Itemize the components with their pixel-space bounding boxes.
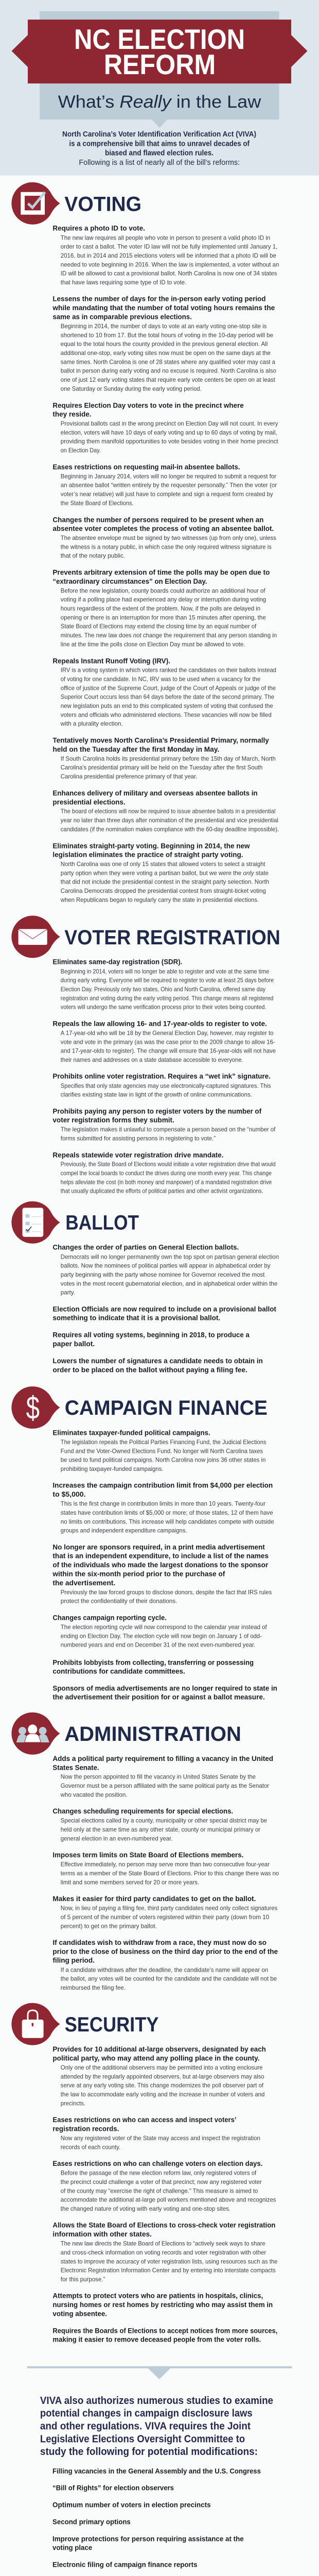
item: cross-check [52, 2222, 278, 2283]
item: photo ID: that have laws requiring some type of ID to vote. [61, 279, 186, 286]
item: order of parties: party. [61, 1289, 75, 1296]
item: paying registrars: voter registration forms they submit. [52, 1116, 174, 1124]
item: same-day registration: Election Day. Previously only two states, Ohio and North Carolina, offered same day [61, 986, 265, 993]
item: voter challenges: the changed nature of voting with early voting and one-stop sites. [61, 2205, 231, 2212]
item: special elections: Changes scheduling requirements for special elections. [52, 1807, 233, 1815]
item: instant runoff: Superior Court occurs less than 64 days before the date of the second primary. The [61, 693, 274, 701]
item: senate vacancy: who vacated the position. [60, 1791, 128, 1798]
item: military ballots: The board of elections will now be required to issue absentee ballots in a presidential [61, 808, 275, 815]
item: lobbyists: Prohibits lobbyists from collecting, transferring or possessing [52, 1658, 254, 1666]
item: candidate withdrawal: If candidates wish to withdraw from a race, they must now do so [52, 1939, 267, 1946]
item: at-large observers: attended by the regularly appointed observers, but at-large observers may also [61, 2073, 264, 2080]
item: third party candidates: percent) to get on the primary ballot. [61, 1922, 157, 1929]
item: third party candidates: of 5 percent of the number of voters registered within their party (down from 10 [61, 1913, 270, 1921]
item: paying registrars: Prohibits paying any person to register voters by the number of [52, 1107, 262, 1115]
list: study topics [52, 2467, 261, 2576]
section: campaign finance [11, 1386, 277, 1701]
item: provisional ballot: something to indicate that it is a provisional ballot. [52, 1314, 220, 1322]
section: voting [11, 182, 279, 903]
item: reporting cycle: numbered years and end on December 31 of the next even-numbered year. [61, 1641, 255, 1649]
item: print media sponsors: protect the confidentiality of their donations. [61, 1598, 177, 1605]
item: contribution limit: groups and independent expenditure campaigns. [61, 1527, 187, 1534]
heading: voter registration: VOTER REGISTRATION [64, 926, 280, 949]
item: at-large observers: Provides for 10 additional at-large observers, designated by each [52, 2045, 266, 2053]
icon: ballot checkbox [11, 182, 60, 225]
item: registration drive mandate: helps alleviate the cost (in both money and manpower) of a mandated registration drive [61, 1178, 272, 1185]
item: registration drive mandate: Repeals statewide voter registration drive mandate. [52, 1151, 224, 1159]
item: registration records: Eases restrictions on who can access and inspect voters’ [52, 2116, 237, 2124]
item: print media sponsors: Previously the law forced groups to disclose donors, despite the fact that IRS rules [61, 1588, 272, 1596]
item: at-large observers: serve at any early voting site. This change modernizes the poll observer part of [61, 2082, 264, 2089]
item: candidate withdrawal: reimbursed the filing fee. [61, 1984, 126, 1991]
item: patients [52, 2292, 273, 2317]
item: at-large observers: political party, who may attend any polling place in the county. [52, 2054, 260, 2062]
item: voter challenges: accommodate the additional at-large poll workers mentioned above and recognizes [61, 2196, 276, 2204]
item: print media sponsors: of the individuals who made the largest donations to the sponsor [52, 1561, 269, 1569]
item: presidential primary: If South Carolina holds its presidential primary before the 15th day of March, North [61, 755, 276, 762]
item: poll extension: hours regardless of the extent of the problem. Now, if the polls are delayed in [61, 605, 260, 612]
item: online registration [52, 1073, 271, 1098]
item: absentee requests: voter’s near relative) will just have to complete and sign a request form created by [61, 490, 273, 498]
text block: studies introduction: potential changes in campaign disclosure laws [40, 2408, 253, 2419]
item: early voting [52, 295, 276, 392]
item: voter challenges: Eases restrictions on who can challenge voters on election days. [52, 2160, 262, 2167]
item: photo ID: order to cast a ballot. The voter ID law will not be fully implemented until January 1, [61, 243, 277, 250]
item: registration records: Now any registered voter of the State may access and inspect the registration [61, 2134, 260, 2142]
item: 16- and 17-year-olds: A 17-year-old who will be 18 by the General Election Day, however, may register to [61, 1029, 274, 1037]
item: absentee requests: an absentee ballot “written entirely by the requester personally.” Then the voter (or [61, 482, 277, 489]
item: print media sponsors: that is an independent expenditure, to include a list of the names [52, 1552, 269, 1560]
item: paper ballot [52, 1331, 250, 1348]
heading: security: SECURITY [65, 2013, 159, 2036]
item: poll extension: State Board of Elections may extend the closing time by an equal number of [61, 623, 257, 630]
item: paying registrars [52, 1107, 276, 1142]
intro text: is a comprehensive bill that aims to unravel decades of [69, 140, 250, 148]
item: special elections: held only at the same time as any other state, county or municipal primary or [61, 1826, 260, 1833]
item: special elections [52, 1807, 268, 1842]
item: poll extension: “extraordinary circumstances” on Election Day. [52, 578, 207, 585]
item: taxpayer funding: prohibiting taxpayer-funded campaigns. [61, 1465, 164, 1472]
intro text: biased and flawed election rules. [105, 149, 214, 158]
item: at-large observers: Only one of the additional observers may be permitted into a voting enclosure [61, 2064, 263, 2071]
item: order of parties: ballots. Now the nominees of political parties will appear in alphabetical order by [61, 1262, 271, 1269]
item: at-large observers: precincts. [61, 2099, 85, 2107]
text block: studies introduction: study the following for potential modifications: [40, 2446, 258, 2458]
item: order of parties: Democrats will no longer permanently own the top spot on partisan general election [61, 1253, 279, 1260]
item: third party candidates: Now, in lieu of paying a filing fee, third party candidates need only collect signatures [61, 1905, 277, 1912]
item: voter challenges [52, 2160, 276, 2212]
item: straight-party voting: Eliminates straight-party voting. Beginning in 2014, the new [52, 842, 250, 850]
heading: ballot: BALLOT [65, 1212, 139, 1234]
item: registration records: registration records. [52, 2125, 119, 2132]
item: term limits [52, 1851, 279, 1886]
item: registration drive mandate: that usually duplicated the efforts of political parties and other activist organizations. [61, 1188, 263, 1195]
item: 16- and 17-year-olds: Repeals the law allowing 16- and 17-year-olds to register to vote. [52, 1020, 267, 1027]
item: media sponsors: the advertisement their position for or against a ballot measure. [52, 1693, 265, 1701]
item: contribution limit: This is the first change in contribution limits in more than 10 years. Twenty-four [61, 1500, 265, 1507]
item: provisional ballot [52, 1305, 276, 1322]
item: media sponsors [52, 1684, 277, 1701]
item: poll extension: voting if a polling place had experienced any delay or interruption during voting [61, 596, 266, 603]
subtitle speech panel [40, 11, 279, 128]
item: media sponsors: Sponsors of media advertisements are no longer required to state in [52, 1684, 277, 1692]
item: straight-party voting: when Republicans began to regularly carry the state in presidential elections. [60, 896, 259, 903]
item: instant runoff [52, 657, 276, 727]
item: precinct: they reside. [52, 411, 92, 418]
intro text [62, 130, 256, 167]
list: study topics: Optimum number of voters in election precincts [52, 2501, 211, 2509]
item: registration records [52, 2116, 260, 2150]
section: voter registration [11, 916, 280, 1195]
item: voter challenges: of the county may “exercise the right of challenge.” This measure is aimed to [61, 2187, 258, 2194]
item: third party candidates: Makes it easier for third party candidates to get on the ballot. [52, 1895, 256, 1903]
icon: padlock [11, 2003, 60, 2045]
section: administration [11, 1713, 279, 1991]
item: voter challenges: Before the passage of the new election reform law, only registered voters of [61, 2170, 257, 2177]
item: order of parties [52, 1244, 279, 1296]
item: instant runoff: office of justice of the Supreme Court, judge of the Court of Appeals or judge of the [61, 684, 276, 691]
item: precinct: election, voters will have 10 days of early voting and up to 60 days of voting by mail, [61, 429, 277, 436]
item: contribution limit: no limits on contributions. This increase will help candidates compete with outside [61, 1518, 274, 1525]
item: straight-party voting: party option when they were voting a partisan ballot, but we were the only state [61, 869, 269, 876]
item: patients: nursing homes or rest homes by restricting who may assist them in [52, 2301, 273, 2309]
item: order of parties: Changes the order of parties on General Election ballots. [52, 1244, 239, 1251]
item: precinct: Requires Election Day voters to vote in the precinct where [52, 401, 244, 409]
item: witnesses: Changes the number of persons required to be present when an [52, 516, 263, 523]
item: precinct [52, 401, 278, 454]
item: instant runoff: voters and officials who administered elections. These vacancies will now be filled [61, 711, 272, 718]
section: ballot [11, 1201, 279, 1374]
item: instant runoff: Repeals Instant Runoff Voting (IRV). [52, 657, 170, 665]
item: paper ballot: paper ballot. [52, 1340, 95, 1348]
item: special elections: Special elections called by a county, municipality or other special district may be [61, 1817, 268, 1824]
item: signatures: Lowers the number of signatures a candidate needs to obtain in [52, 1357, 263, 1365]
item: term limits: Imposes term limits on State Board of Elections members. [52, 1851, 243, 1859]
item: third party candidates [52, 1895, 277, 1929]
item: absentee requests: Beginning in January 2014, voters will no longer be required to submit a request for [61, 472, 276, 480]
item: at-large observers: the law to accommodate early voting and the increase in number of voters and [61, 2091, 264, 2098]
item: same-day registration [52, 958, 274, 1011]
item: special elections: general election in an even-numbered year. [61, 1835, 172, 1842]
item: military ballots: Enhances delivery of military and overseas absentee ballots in [52, 789, 258, 797]
item: absentee requests: the State Board of Elections. [61, 499, 134, 506]
heading: administration: ADMINISTRATION [64, 1723, 241, 1745]
item: early voting: same as in comparable previous elections. [52, 313, 192, 320]
item: deceased voters [52, 2327, 277, 2344]
item: poll extension: Before the new legislation, county boards could authorize an additional hour of [61, 587, 265, 594]
item: military ballots: candidates (if the nomination makes compliance with the 60-day deadline impossible). [61, 825, 279, 833]
item: senate vacancy: States Senate. [52, 1764, 99, 1771]
item: straight-party voting: that did not include the presidential contest in the straight party selection. North [61, 878, 269, 886]
list: study topics: Improve protections for person requiring assistance at the [52, 2535, 244, 2543]
item: taxpayer funding: Fund and the Voter-Owned Elections Fund. No longer will North Carolina taxes [61, 1447, 263, 1454]
item: candidate withdrawal: If a candidate withdraws after the deadline, the candidate’s name will appear on [61, 1966, 268, 1973]
item: at-large observers [52, 2045, 266, 2107]
item: order of parties: votes in the most recent gubernatorial election, and in alphabetical order within the [61, 1280, 278, 1287]
text block: studies introduction: Legislative Elections Oversight Committee to [40, 2433, 245, 2445]
item: precinct: providing them manifold opportunities to vote besides voting in their home precinct [61, 438, 278, 445]
item: senate vacancy: Governor must be a person affiliated with the same political party as the Senator [61, 1782, 269, 1789]
item: print media sponsors: within the six-month period prior to the purchase of [52, 1570, 225, 1578]
item: term limits: limit and some members served for 20 or more years. [61, 1878, 199, 1886]
item: cross-check: states to improve the accuracy of voter registration lists, using resources such as the [61, 2258, 278, 2265]
icon: dollar sign: $ [26, 1391, 40, 1426]
item: registration records: records of each county. [61, 2143, 120, 2150]
arrow: divider pointing down [27, 2366, 292, 2379]
item: poll extension [52, 569, 277, 648]
item: early voting: equal to the total hours the county provided in the previous general election. All [61, 341, 268, 348]
item: online registration: clarifies existing state law in light of the growth of online communications. [61, 1091, 252, 1098]
icon: three people [11, 1713, 60, 1755]
item: lobbyists: contributions for candidate committees. [52, 1668, 185, 1675]
item: 16- and 17-year-olds: their names and addresses on a state database accessible to everyone. [61, 1056, 243, 1063]
heading: voting: VOTING [64, 193, 141, 215]
item: early voting: additional one-stop, early voting sites now must be open on the same days at the [61, 349, 271, 357]
item: presidential primary: Carolina’s presidential primary will be held on the Tuesday after the first South [61, 764, 262, 771]
item: military ballots: year no later than three days after nomination of the presidential and vice presidential [61, 817, 278, 824]
item: instant runoff: of voting for one candidate. In NC, IRV was to be used when a vacancy for the [61, 675, 261, 683]
item: early voting: one Saturday or Sunday during the early voting period. [61, 385, 202, 392]
subtitle: What’s Really in the Law [58, 92, 261, 112]
item: straight-party voting [52, 842, 269, 903]
item: reporting cycle: Changes campaign reporting cycle. [52, 1614, 167, 1621]
item: print media sponsors [52, 1543, 272, 1605]
item: contribution limit [52, 1482, 274, 1534]
item: presidential primary [52, 737, 276, 780]
item: precinct: on Election Day. [61, 447, 101, 454]
item: registration drive mandate: compel the local boards to conduct the drives during one month every year. This change [61, 1170, 272, 1177]
item: deceased voters: making it easier to remove deceased people from the voter rolls. [52, 2336, 261, 2344]
list: study topics: Filling vacancies in the General Assembly and the U.S. Congress [52, 2467, 261, 2475]
item: candidate withdrawal: filing period. [52, 1957, 95, 1964]
item: early voting: Lessens the number of days for the in-person early voting period [52, 295, 265, 303]
item: cross-check: Electronic Registration Information Center and by entering into interstate compacts [61, 2267, 276, 2274]
header panel [0, 0, 319, 176]
item: lobbyists [52, 1658, 254, 1675]
item: taxpayer funding: be used to fund political campaigns. North Carolina now joins 36 other states in [61, 1456, 265, 1464]
list: study topics: “Bill of Rights” for election observers [52, 2484, 174, 2492]
item: senate vacancy: Now the person appointed to fill the vacancy in United States Senate by the [61, 1773, 256, 1781]
list: study topics: voting place [52, 2544, 92, 2552]
item: witnesses [52, 516, 276, 560]
item: witnesses: The absentee envelope must be signed by two witnesses (up from only one), unless [61, 534, 276, 541]
item: cross-check: and cross-check information on voting records and voter registration with other [61, 2249, 266, 2256]
item: witnesses: absentee voter completes the process of voting an absentee ballot. [52, 525, 274, 533]
item: paper ballot: Requires all voting systems, beginning in 2018, to produce a [52, 1331, 250, 1339]
item: early voting: while mandating that the number of total voting hours remains the [52, 304, 275, 312]
item: early voting: same times. North Carolina is one of 28 states where any qualified voter may cast a [61, 358, 275, 365]
item: photo ID: 2016, but in 2014 and 2015 elections voters will be informed that a photo ID will be [61, 252, 276, 259]
title ribbon [11, 20, 308, 83]
item: instant runoff: with a plurality election. [60, 720, 123, 727]
item: straight-party voting: legislation eliminates the practice of straight party voting. [52, 851, 243, 859]
item: same-day registration: Eliminates same-day registration (SDR). [52, 958, 182, 966]
item: reporting cycle: The election reporting cycle will now correspond to the calendar year instead of [61, 1623, 267, 1631]
item: same-day registration: registration and voting during the early voting period. This change means all registered [61, 994, 273, 1002]
item: paying registrars: The legislation makes it unlawful to compensate a person based on the “number of [61, 1126, 276, 1133]
item: photo ID [52, 225, 279, 286]
item: online registration: Prohibits online voter registration. Requires a “wet ink” signature. [52, 1073, 271, 1080]
item: absentee requests: Eases restrictions on requesting mail-in absentee ballots. [52, 463, 240, 471]
item: poll extension: line at the time the polls close on Election Day must be allowed to vote. [61, 640, 245, 648]
list: study topics: Electronic filing of campaign finance reports [52, 2561, 198, 2568]
list: study topics: Second primary options [52, 2518, 131, 2526]
item: 16- and 17-year-olds: vote and vote in the primary (as was the case prior to the 2009 change to allow 16- [61, 1038, 275, 1045]
item: photo ID: ID will be allowed to cast a provisional ballot. North Carolina is now one of 34 states [61, 270, 277, 277]
item: early voting: shortened to 10 from 17. But the total hours of voting in the 10-day period will be [61, 331, 273, 338]
item: order of parties: party beginning with the party whose nominee for Governor received the most [61, 1271, 265, 1278]
item: early voting: ballot in person during early voting and no excuse is required. North Carolina is also [61, 367, 276, 375]
item: reporting cycle: ending on Election Day. The election cycle will now begin on January 1 of odd- [61, 1632, 262, 1639]
item: reporting cycle [52, 1614, 267, 1649]
item: photo ID: needed to vote beginning in 2016. When the law is implemented, a voter without an [61, 261, 279, 268]
section: security [11, 2003, 278, 2344]
item: print media sponsors: No longer are sponsors required, in a print media advertisement [52, 1543, 265, 1551]
item: signatures: order to be placed on the ballot without paying a filing fee. [52, 1366, 247, 1374]
item: senate vacancy [52, 1755, 273, 1798]
item: military ballots: presidential elections. [52, 798, 126, 806]
item: cross-check: Allows the State Board of Elections to cross-check voter registration [52, 2222, 275, 2229]
item: same-day registration: during early voting. Everyone will be required to register to vote at least 25 days before [61, 977, 274, 984]
item: instant runoff: IRV is a voting system in which voters ranked the candidates on their ballots instead [61, 667, 276, 674]
item: same-day registration: Beginning in 2014, voters will no longer be able to register and vote at the same time [61, 968, 269, 975]
item: contribution limit: to $5,000. [52, 1490, 85, 1498]
item: provisional ballot: Election Officials are now required to include on a provisional ballot [52, 1305, 276, 1313]
item: poll extension: minutes. The new law does not change the requirement that any person standing in [61, 632, 277, 639]
item: patients: Attempts to protect voters who are patients in hospitals, clinics, [52, 2292, 263, 2300]
heading: campaign finance: CAMPAIGN FINANCE [65, 1397, 268, 1419]
title ribbon: NC ELECTION [74, 23, 245, 55]
item: candidate withdrawal: the ballot, any votes will be counted for the candidate and the candidate will not be [61, 1975, 277, 1982]
text block: studies introduction [40, 2395, 273, 2458]
item: paying registrars: forms submitted for assisting persons in registering to vote.” [61, 1134, 216, 1142]
item: term limits: Effective immediately, no person may serve more than two consecutive four-year [61, 1861, 270, 1868]
item: witnesses: that of the notary public. [61, 552, 125, 560]
item: voter challenges: the precinct could challenge a voter of that precinct; now any registered voter [61, 2178, 262, 2185]
item: cross-check: for this purpose.” [61, 2276, 105, 2283]
item: cross-check: information with other states. [52, 2230, 152, 2238]
item: patients: voting absentee. [52, 2310, 107, 2317]
text block: studies introduction: VIVA also authorizes numerous studies to examine [40, 2395, 273, 2406]
item: term limits: terms as a member of the State Board of Elections. Prior to this change there was no [61, 1870, 279, 1877]
intro text: Following is a list of nearly all of the bill’s reforms: [79, 159, 240, 167]
item: taxpayer funding: The legislation repeals the Political Parties Financing Fund, the Judicial Elections [61, 1438, 267, 1446]
item: poll extension: opening or there is an interruption for more than 15 minutes after opening, the [61, 614, 266, 621]
item: senate vacancy: Adds a political party requirement to filling a vacancy in the United [52, 1755, 273, 1762]
item: straight-party voting: Carolina Democrats dropped the presidential contest from straight-ticket voting [61, 887, 266, 894]
item: poll extension: Prevents arbitrary extension of time the polls may be open due to [52, 569, 270, 577]
item: cross-check: The new law directs the State Board of Elections to “actively seek ways to share [61, 2240, 265, 2247]
item: 16- and 17-year-olds: and 17-year-olds to register). The change will ensure that 16-year-olds will not have [61, 1047, 276, 1055]
item: contribution limit: Increases the campaign contribution limit from $4,000 per election [52, 1482, 273, 1489]
item: candidate withdrawal: prior to the close of business on the third day prior to the end of the [52, 1947, 278, 1955]
item: straight-party voting: North Carolina was one of only 15 states that allowed voters to select a straight [61, 860, 265, 868]
item: candidate withdrawal [52, 1939, 278, 1991]
item: presidential primary: Tentatively moves North Carolina’s Presidential Primary, normally [52, 737, 269, 744]
item: early voting: one of just 12 early voting states that require early vote centers be open on at least [61, 376, 276, 383]
text block: studies introduction: and other regulations. VIVA requires the Joint [40, 2421, 251, 2432]
item: presidential primary: held on the Tuesday after the first Monday in May. [52, 745, 219, 753]
item: contribution limit: states have contribution limits of $5,000 or more; of those states, 12 of them have [61, 1509, 273, 1516]
item: print media sponsors: the advertisement. [52, 1579, 115, 1587]
item: absentee requests [52, 463, 277, 506]
item: taxpayer funding: Eliminates taxpayer-funded political campaigns. [52, 1429, 210, 1437]
item: online registration: Specifies that only state agencies may use electronically-captured signatures. This [61, 1082, 271, 1089]
item: registration drive mandate [52, 1151, 276, 1195]
item: deceased voters: Requires the Boards of Elections to accept notices from more sources, [52, 2327, 277, 2334]
item: taxpayer funding [52, 1429, 267, 1472]
item: photo ID: Requires a photo ID to vote. [52, 225, 145, 232]
item: presidential primary: Carolina presidential preference primary of that year. [61, 773, 198, 780]
item: instant runoff: new legislation puts an end to this complicated system of voting that confused the [61, 702, 273, 709]
item: early voting: Beginning in 2014, the number of days to vote at an early voting one-stop site is [61, 323, 267, 330]
icon: dollar sign [11, 1386, 60, 1429]
title ribbon: REFORM [104, 48, 216, 80]
icon: ballot sheet [11, 1201, 60, 1244]
item: witnesses: the witness is a notary public, in which case the only required witness signature is [61, 543, 272, 550]
item: photo ID: The new law requires all people who vote in person to present a valid photo ID in [61, 234, 270, 241]
item: military ballots [52, 789, 279, 833]
icon: envelope [11, 916, 60, 958]
item: precinct: Provisional ballots cast in the wrong precinct on Election Day will not count. In every [61, 420, 278, 427]
item: 16- and 17-year-olds [52, 1020, 276, 1063]
intro text: North Carolina’s Voter Identification Verification Act (VIVA) [62, 130, 256, 139]
item: signatures [52, 1357, 263, 1374]
item: registration drive mandate: Previously, the State Board of Elections would initiate a voter registration drive that would [61, 1161, 276, 1168]
item: same-day registration: voters will undergo the same verification process prior to their votes being counted. [61, 1004, 267, 1011]
